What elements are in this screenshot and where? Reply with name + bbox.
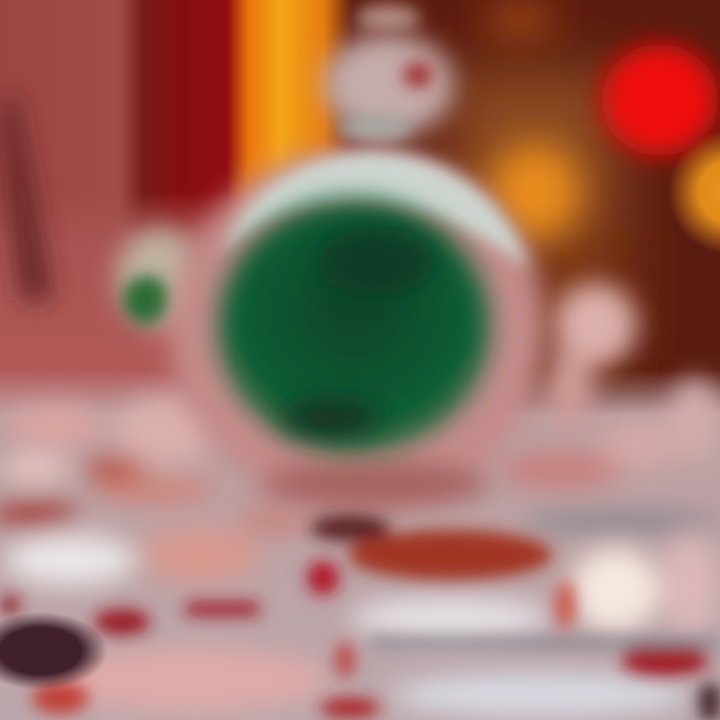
top figure — [322, 4, 454, 142]
small green ornament at left — [116, 228, 204, 328]
ornament pink body — [170, 148, 546, 512]
ornament white top highlight — [222, 152, 528, 270]
ornament lower shade — [260, 462, 490, 506]
ornament dark green core — [282, 228, 433, 436]
bokeh lights — [482, 2, 720, 270]
large ornament — [170, 148, 546, 512]
red base under ornament — [310, 515, 552, 580]
ornament green centre — [218, 199, 490, 451]
right pink candy shape — [546, 283, 637, 427]
checked table floor — [0, 370, 720, 720]
